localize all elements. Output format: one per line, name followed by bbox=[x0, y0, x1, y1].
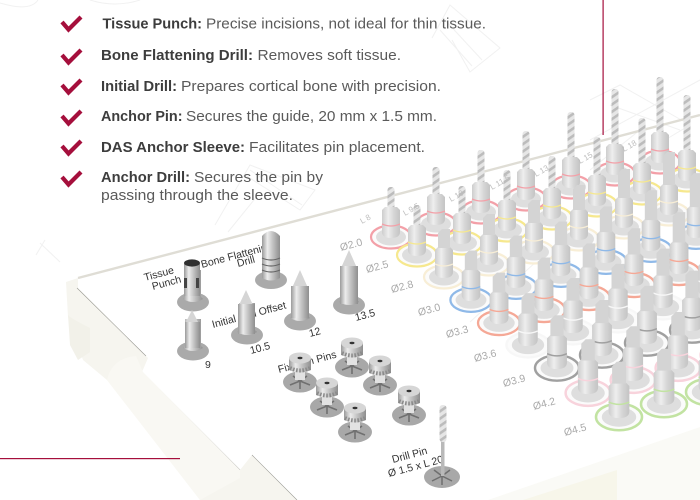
instrument labels: Initial Drill Offset bbox=[211, 300, 288, 331]
diameter labels: Ø4.5 bbox=[563, 421, 588, 439]
drill row: diameter 3.9 bbox=[535, 271, 700, 381]
length labels bbox=[358, 138, 639, 226]
instrument labels bbox=[143, 240, 445, 480]
item: anchor drill: passing through the sleeve. bbox=[101, 187, 293, 204]
instrument labels: Drill bbox=[236, 254, 256, 270]
item: bone flattening drill: Removes soft tissue. bbox=[258, 47, 401, 64]
item: bone flattening drill bbox=[101, 47, 401, 64]
length labels: L 8 bbox=[358, 212, 373, 226]
check icon 2 bbox=[62, 50, 81, 62]
instrument labels: Drill Pin bbox=[391, 445, 429, 466]
drill row: diameter 4.2 bbox=[566, 297, 700, 406]
tissue punch bbox=[177, 259, 209, 312]
faint line-art sketches bbox=[0, 0, 700, 322]
item: tissue punch: Tissue Punch: bbox=[102, 16, 202, 32]
check icon 3 bbox=[62, 80, 81, 92]
diameter labels: Ø2.0 bbox=[339, 236, 364, 254]
instrument labels: 13.5 bbox=[354, 307, 377, 324]
diameter labels: Ø4.2 bbox=[532, 395, 557, 413]
pin 13.5 bbox=[333, 250, 365, 314]
diameter labels: Ø3.9 bbox=[502, 372, 527, 390]
item: anchor drill: Anchor Drill: bbox=[101, 169, 190, 186]
check icon 1 bbox=[62, 17, 81, 30]
pin 9 bbox=[177, 310, 209, 360]
length labels: L 9.5 bbox=[402, 201, 422, 218]
check icon 4 bbox=[62, 111, 81, 124]
diameter labels: Ø2.8 bbox=[390, 278, 415, 296]
item: anchor drill: Secures the pin by bbox=[194, 169, 324, 186]
pin 12 bbox=[284, 270, 316, 330]
instrument labels: 12 bbox=[308, 325, 322, 340]
drill row: diameter 2.0 bbox=[371, 77, 680, 248]
instrument labels: Ø 1.5 x L 20 bbox=[387, 454, 445, 480]
diameter labels bbox=[339, 236, 588, 439]
length labels: L 15 bbox=[576, 150, 595, 166]
length labels: L 10 bbox=[448, 188, 466, 204]
instrument labels: 10.5 bbox=[249, 340, 272, 357]
item: bone flattening drill: Bone Flattening Drill: bbox=[101, 47, 253, 64]
instrument labels: Tissue bbox=[143, 264, 175, 284]
drill row: diameter 2.5 bbox=[397, 95, 700, 266]
check icon 6 bbox=[62, 172, 81, 184]
drill row: diameter 3.0 bbox=[450, 173, 700, 312]
length labels: L 11.5 bbox=[488, 173, 512, 192]
item: DAS anchor sleeve: DAS Anchor Sleeve: bbox=[101, 139, 245, 156]
drill row: diameter 4.5 bbox=[596, 334, 700, 430]
item: initial drill: Initial Drill: bbox=[101, 78, 177, 95]
check icon 5 bbox=[62, 141, 81, 154]
instrument labels: Fixation Pins bbox=[277, 349, 338, 376]
item: anchor pin: Anchor Pin: bbox=[101, 108, 182, 125]
red vertical rule bbox=[602, 0, 604, 135]
bone flattening drill bbox=[255, 231, 287, 289]
drill pin bbox=[424, 405, 460, 488]
item: DAS anchor sleeve bbox=[101, 139, 425, 156]
fixation pins bbox=[283, 338, 426, 442]
item: tissue punch: Precise incisions, not ideal for thin tissue. bbox=[206, 16, 486, 32]
drill row: diameter 3.6 bbox=[506, 232, 700, 357]
item: anchor pin: Secures the guide, 20 mm x 1.5 mm. bbox=[186, 108, 437, 125]
drill row: diameter 2.8 bbox=[424, 140, 700, 288]
drill row: diameter 3.3 bbox=[478, 199, 700, 335]
length labels: L 13 bbox=[532, 163, 551, 179]
item: anchor drill bbox=[101, 169, 324, 204]
diameter labels: Ø3.3 bbox=[445, 323, 470, 341]
red horizontal rule bbox=[0, 458, 180, 459]
instrument labels: 9 bbox=[205, 359, 211, 371]
length labels: L 18 bbox=[620, 138, 639, 154]
pin 10.5 bbox=[231, 290, 263, 344]
instrument labels: Bone Flattening bbox=[200, 240, 274, 271]
instrument labels: Punch bbox=[151, 274, 183, 293]
diameter labels: Ø3.0 bbox=[417, 301, 442, 319]
tray frame bbox=[66, 115, 700, 500]
item: DAS anchor sleeve: Facilitates pin placement. bbox=[249, 139, 425, 156]
diameter labels: Ø3.6 bbox=[473, 347, 498, 365]
diameter labels: Ø2.5 bbox=[365, 258, 390, 276]
feature list bbox=[62, 16, 486, 204]
item: initial drill: Prepares cortical bone with precision. bbox=[181, 78, 441, 95]
